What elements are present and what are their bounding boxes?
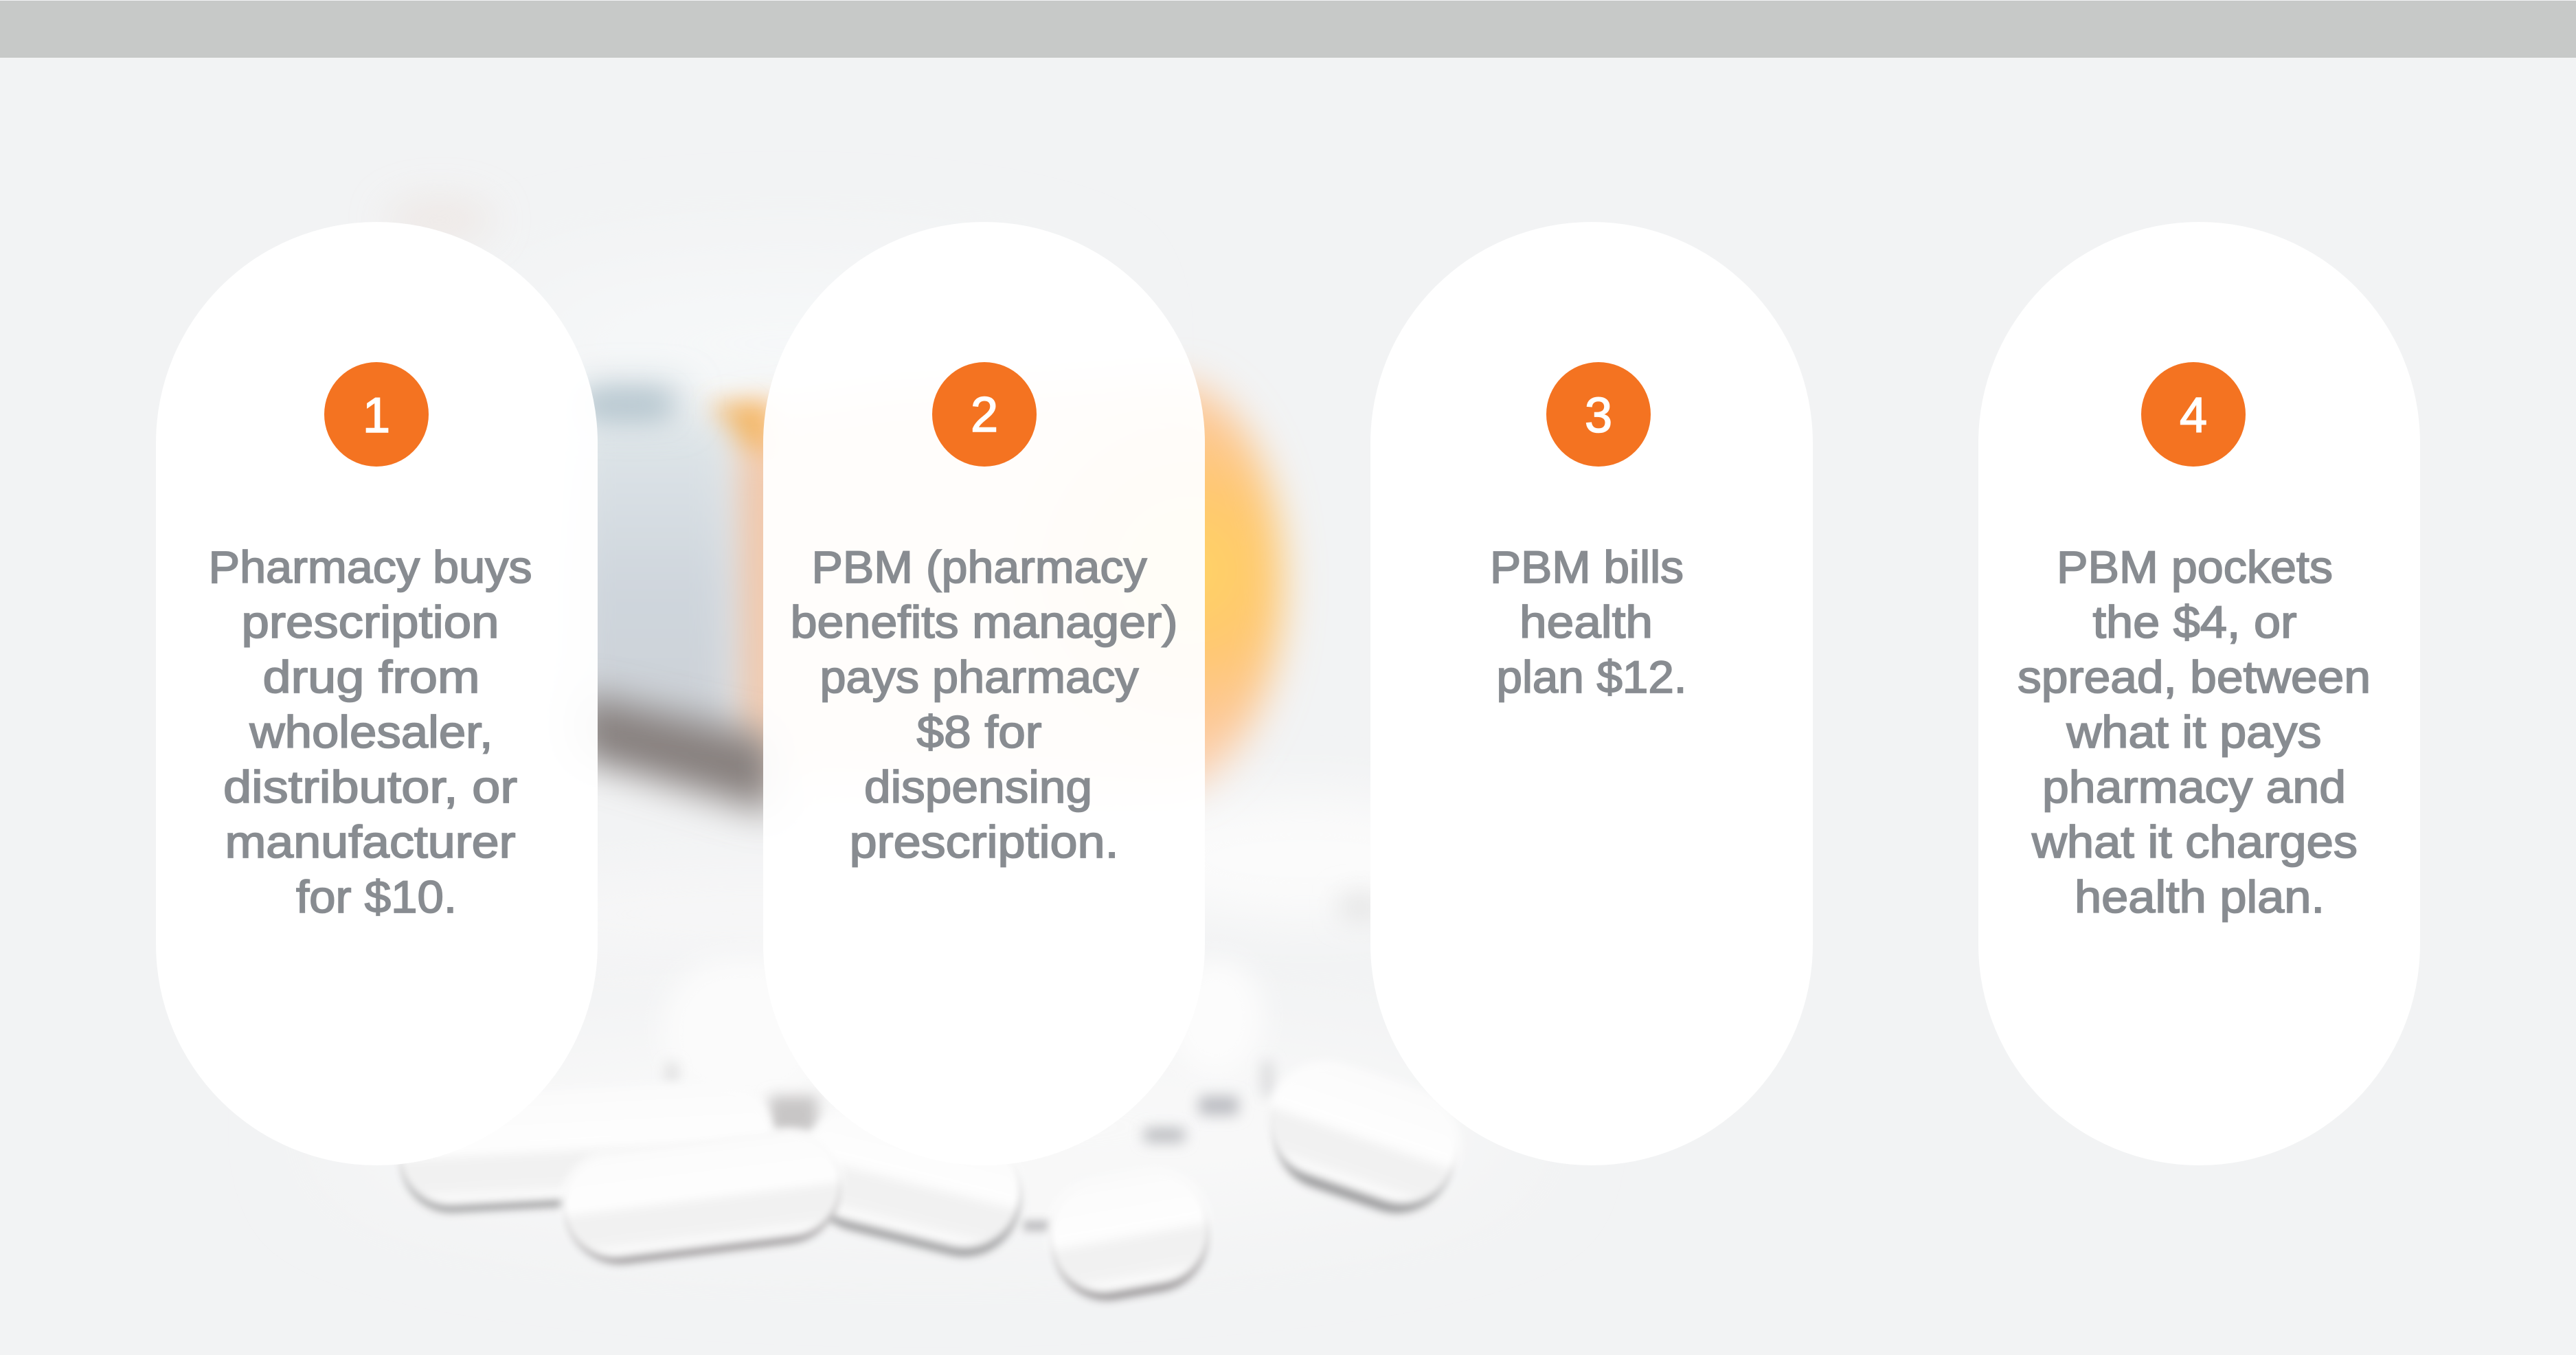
panel: step 4	[1978, 222, 2420, 1165]
tablet D	[1039, 1159, 1219, 1308]
panel: step 2	[763, 222, 1205, 1165]
step 1 text	[209, 541, 532, 922]
panel: step 1	[156, 222, 598, 1165]
bottle dark band	[577, 694, 776, 814]
blurry background tablets	[663, 959, 1272, 1231]
tablet C	[790, 1093, 1035, 1268]
step 2 text: dispensing	[864, 761, 1092, 812]
step 1 text: Pharmacy buys	[209, 541, 532, 592]
step 4 text: health plan.	[2075, 871, 2325, 922]
step 3 text	[1490, 541, 1687, 702]
step 2 text: benefits manager)	[791, 596, 1178, 647]
step 4 text	[2018, 541, 2371, 922]
step 4 text: spread, between	[2018, 651, 2371, 702]
step 2 text: PBM (pharmacy	[812, 541, 1147, 592]
step 4 capsule	[1978, 222, 2420, 1165]
step 4 number badge: 4	[2180, 388, 2207, 443]
step 3 text: plan $12.	[1496, 651, 1687, 702]
step 1 text: manufacturer	[225, 816, 515, 867]
step 4 number badge	[2141, 362, 2246, 467]
tablet A	[394, 1079, 776, 1215]
soft highlights	[501, 282, 1078, 405]
step 1 text: prescription	[242, 596, 499, 647]
step 1 text: wholesaler,	[249, 706, 493, 757]
bottle orange body	[711, 381, 1283, 790]
step 4 text: pharmacy and	[2042, 761, 2346, 812]
step 2 number badge: 2	[971, 388, 998, 443]
step 3 number badge	[1546, 362, 1651, 467]
step 2 capsule	[763, 222, 1205, 1165]
step 4 text: PBM pockets	[2057, 541, 2333, 592]
step 1 number badge: 1	[363, 388, 390, 443]
step 2 text	[791, 541, 1178, 867]
tablet E	[1253, 1046, 1476, 1227]
step 4 text: what it charges	[2031, 816, 2358, 867]
step 2 text: $8 for	[916, 706, 1041, 757]
blurred photo: pill bottle and tablets	[343, 198, 1511, 1308]
step 4 text: the $4, or	[2092, 596, 2297, 647]
bottle neck tint	[385, 198, 495, 242]
step 2 number badge	[932, 362, 1037, 467]
panel: step 3	[1370, 222, 1813, 1165]
step 2 text: pays pharmacy	[820, 651, 1139, 702]
step 4 text: what it pays	[2066, 706, 2322, 757]
step 1 text: drug from	[262, 651, 479, 702]
step 3 capsule	[1370, 222, 1813, 1165]
top grey band	[0, 1, 2576, 58]
bottle label	[570, 388, 735, 749]
step 2 text: prescription.	[850, 816, 1119, 867]
step 3 number badge: 3	[1585, 388, 1612, 443]
tablet B	[555, 1122, 849, 1269]
step 1 text: distributor, or	[223, 761, 517, 812]
step 1 number badge	[324, 362, 429, 467]
step 3 text: health	[1519, 596, 1653, 647]
step 1 capsule	[156, 222, 598, 1165]
step 1 text: for $10.	[296, 871, 457, 922]
step 3 text: PBM bills	[1490, 541, 1684, 592]
